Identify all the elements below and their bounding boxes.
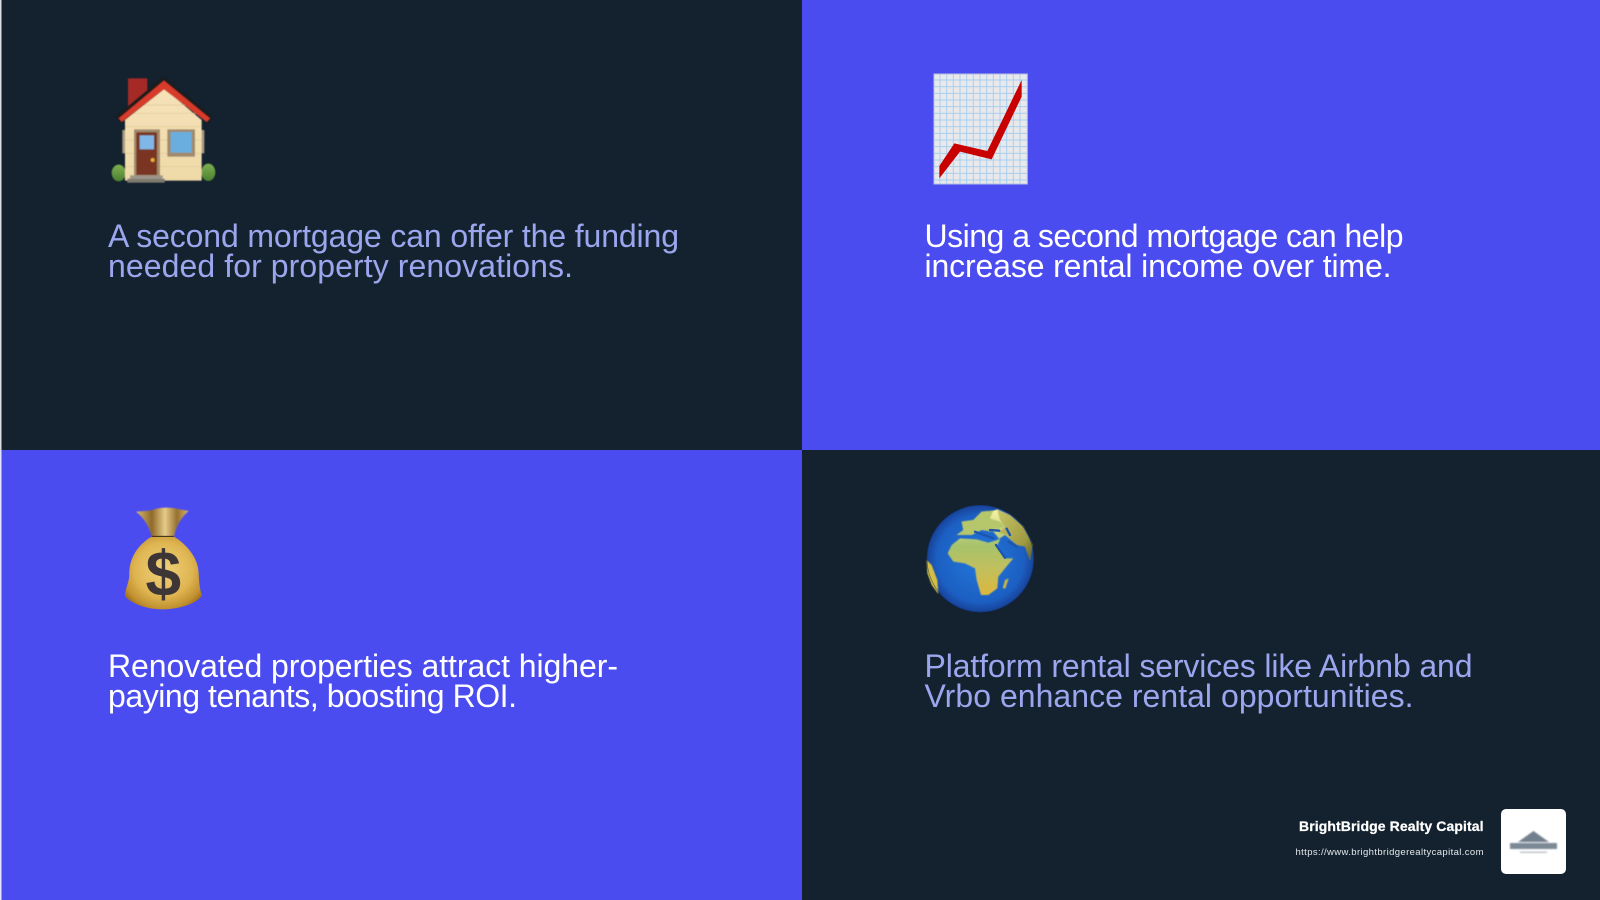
text: return on investment: paying tenants, boosting ROI. [108, 678, 517, 714]
panel: renovation funding [0, 0, 802, 450]
panel: return on investment [0, 450, 802, 900]
text: renovation funding: A second mortgage can offer the funding [108, 218, 679, 254]
panel: platform rentals [802, 450, 1600, 900]
text: platform rentals: Platform rental services like Airbnb and [924, 648, 1472, 684]
text: return on investment: Renovated properties attract higher- [108, 648, 618, 684]
brand footer [1296, 809, 1566, 874]
icon: money bag [125, 508, 202, 609]
text: rental income: Using a second mortgage can help [924, 218, 1404, 254]
text: renovation funding: needed for property renovations. [108, 248, 573, 284]
icon: rising chart [934, 74, 1027, 184]
left edge strip [0, 0, 2, 900]
icon: money bag: $ [146, 537, 181, 609]
text: rental income: increase rental income over time. [924, 248, 1392, 284]
brand name: BrightBridge Realty Capital [1299, 818, 1484, 834]
brand url: https://www.brightbridgerealtycapital.com [1296, 847, 1484, 858]
icon: globe [927, 505, 1034, 612]
panel: rental income [802, 0, 1600, 450]
logo [1501, 809, 1566, 874]
icon: house [112, 77, 215, 183]
text: platform rentals: Vrbo enhance rental opportunities. [924, 678, 1414, 714]
